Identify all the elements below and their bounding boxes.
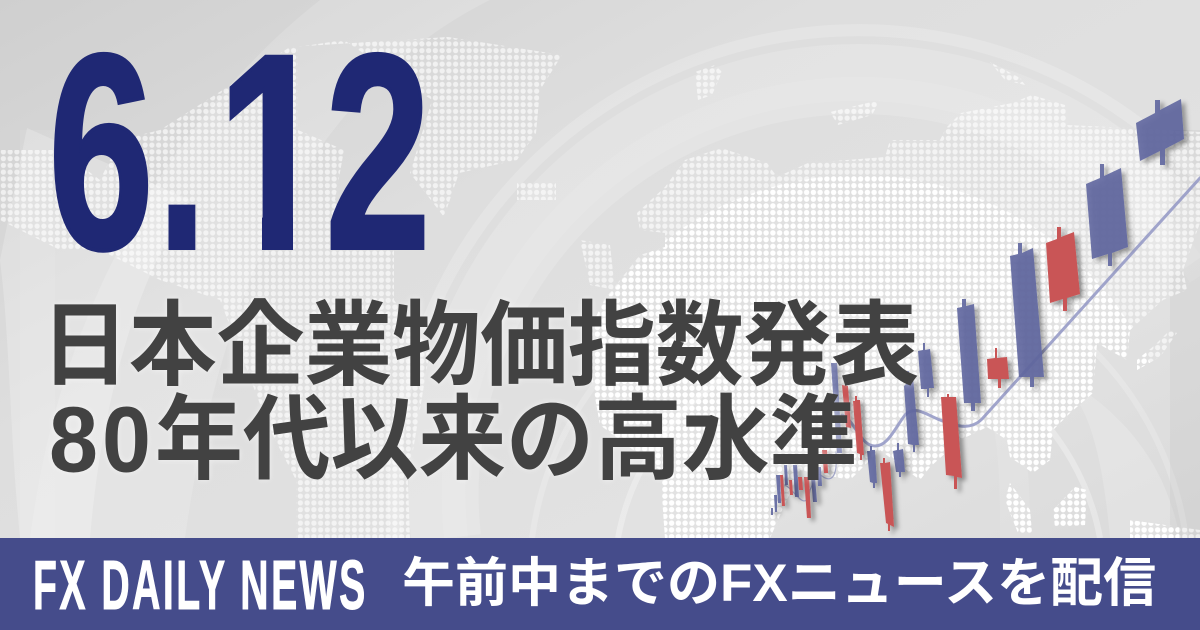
brand label: FX DAILY NEWS <box>33 547 368 625</box>
title line 2: 80年代以来の高水準 <box>49 388 857 491</box>
footer bar <box>0 538 1200 630</box>
arcs <box>394 30 1200 538</box>
red candles <box>780 227 1080 531</box>
moving average line <box>785 178 1200 501</box>
date: 6.12: 6 <box>48 0 154 308</box>
tagline: 午前中までのFXニュースを配信 <box>402 554 1156 613</box>
date: 6.12: 2 <box>325 0 431 308</box>
blue candles <box>771 99 1184 515</box>
title line 1: 日本企業物価指数発表 <box>41 294 919 397</box>
date: 6.12 <box>54 52 424 253</box>
date: 6.12: . <box>158 0 206 308</box>
date: 6.12: 1 <box>217 0 329 308</box>
